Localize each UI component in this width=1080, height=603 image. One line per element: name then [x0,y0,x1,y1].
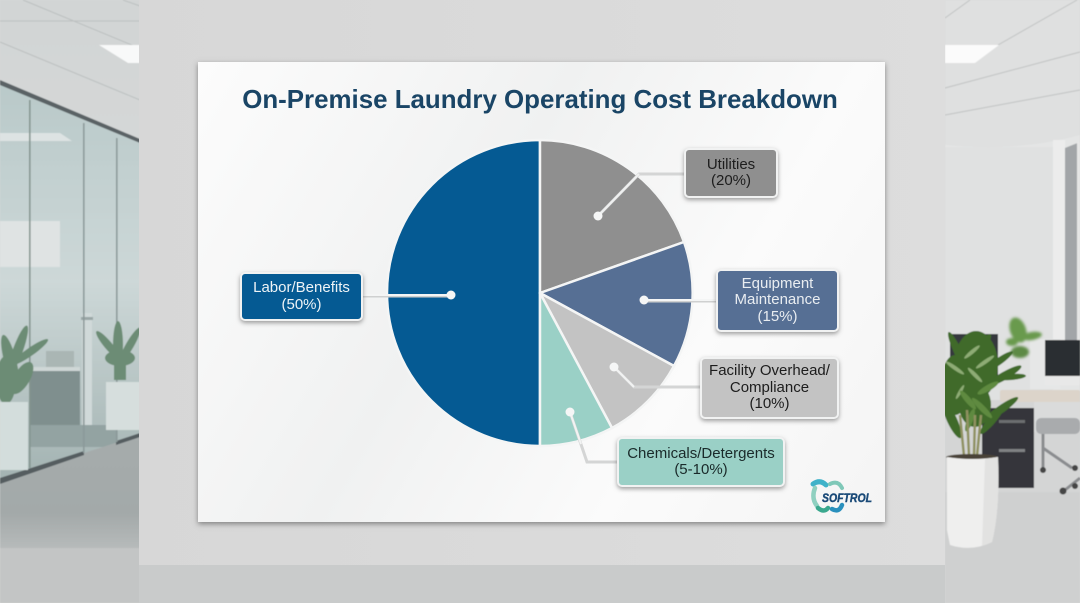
slice: labor/benefits [387,140,540,446]
label: equipment maintenance: (15%) [757,308,798,325]
label: facility overhead/compliance [700,357,839,419]
label: labor/benefits: Labor/Benefits [253,279,350,296]
label: equipment maintenance: Maintenance [735,291,820,308]
leader: chemicals [566,408,618,462]
slice: facility overhead [540,293,674,428]
label: chemicals/detergents: (5-10%) [674,461,728,478]
label: facility overhead/compliance: (10%) [749,395,790,412]
leader: utilities [594,174,685,220]
slice: utilities [540,140,684,293]
label: chemicals/detergents [617,437,785,487]
leader: equipment [640,296,717,304]
small plant [1006,315,1043,358]
leader: labor [362,290,456,300]
logo: Softrol [810,479,872,513]
label: utilities: Utilities [707,156,755,172]
left room [0,0,143,603]
big plant [939,330,1026,440]
right room [939,0,1080,603]
label: labor/benefits: (50%) [281,296,322,312]
panel: cost breakdown card [198,62,885,522]
wall [139,0,945,565]
slice: equipment maintenance [540,242,693,366]
label: facility overhead/compliance: Compliance [730,379,809,396]
label: equipment maintenance: Equipment [742,275,813,292]
slice: chemicals [540,293,612,446]
floor [0,435,140,565]
label: chemicals/detergents: Chemicals/Detergents [627,444,775,462]
leader: facility [610,362,701,387]
planter [946,454,998,460]
label: labor/benefits [240,272,363,321]
label: facility overhead/compliance: Facility Overhead/ [709,362,830,379]
label: utilities [684,148,778,198]
label: equipment maintenance [716,269,839,332]
label: utilities: (20%) [711,172,751,189]
title: On-Premise Laundry Operating Cost Breakdown [242,86,838,114]
